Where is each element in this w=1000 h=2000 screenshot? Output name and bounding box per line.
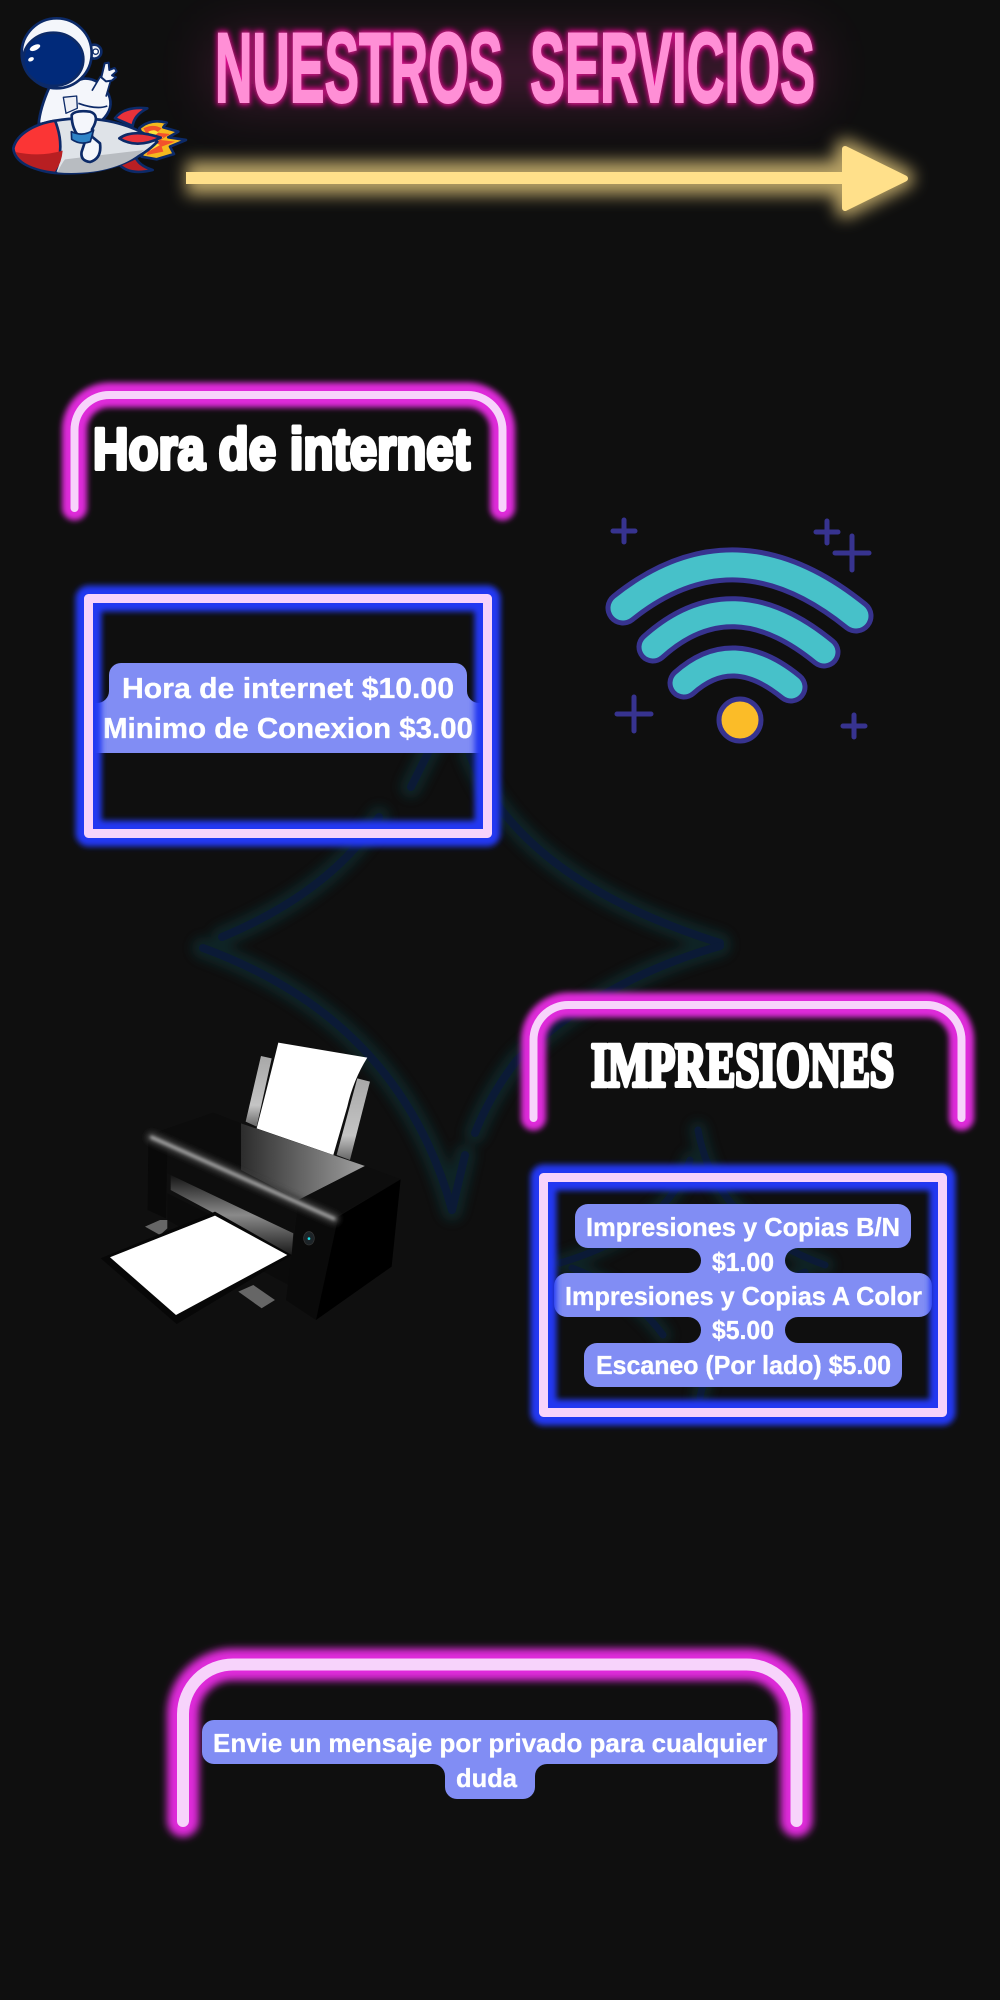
icon: wifi [613, 520, 869, 741]
box frame: hora de internet [88, 598, 488, 834]
heading bracket: impresiones [534, 1005, 962, 1118]
wifi dot [719, 699, 761, 741]
price pills: impresiones: Impresiones y Copias A Color [565, 1281, 922, 1311]
title: NUESTROS [215, 12, 503, 123]
price pills: impresiones: Impresiones y Copias B/N [586, 1212, 900, 1242]
heading bracket: hora de internet [74, 395, 502, 508]
power button [304, 1232, 314, 1245]
price pills: impresiones: $5.00 [712, 1315, 774, 1345]
supports under tray [145, 1220, 275, 1308]
astronaut leg [71, 111, 100, 162]
astronaut helmet [22, 18, 101, 88]
price pills: hora de internet: Hora de internet $10.00 [122, 673, 454, 705]
price pills: hora de internet [93, 663, 484, 753]
paper sheet [257, 1043, 367, 1155]
message pill: duda [456, 1763, 518, 1793]
heading: hora de internet: Hora de internet [93, 417, 470, 482]
printer front [148, 1137, 298, 1287]
astronaut peace hand [101, 63, 117, 81]
rocket flames [139, 121, 186, 159]
arrow [186, 149, 905, 208]
box frame: impresiones [544, 1178, 942, 1412]
background star small [560, 1130, 825, 1397]
price pills: hora de internet: Minimo de Conexion $3.00 [103, 713, 473, 745]
panel: impresiones [534, 1005, 962, 1412]
wifi arcs [623, 565, 856, 687]
background star large [203, 745, 720, 1210]
paper supports [246, 1056, 370, 1160]
price pills: impresiones: $1.00 [712, 1247, 774, 1277]
bracket: contact message [183, 1664, 796, 1821]
panel: hora de internet [74, 395, 502, 834]
rocket fins [115, 108, 153, 172]
title: NUESTROS [215, 12, 503, 123]
paper tray [101, 1212, 292, 1324]
price pills: impresiones [554, 1204, 932, 1387]
sparkle plus signs [613, 520, 869, 737]
icon: printer [101, 1043, 401, 1324]
panel: contact message [183, 1664, 796, 1821]
icon: astronaut riding rocket [13, 18, 186, 173]
message pill: Envie un mensaje por privado para cualquier [213, 1728, 767, 1758]
rocket body [13, 118, 161, 173]
top panel [148, 1113, 365, 1200]
message pill [202, 1720, 778, 1799]
astronaut torso [39, 76, 111, 124]
chrome bar [152, 1137, 334, 1219]
price pills: impresiones: Escaneo (Por lado) $5.00 [596, 1350, 891, 1380]
right block [286, 1166, 401, 1320]
